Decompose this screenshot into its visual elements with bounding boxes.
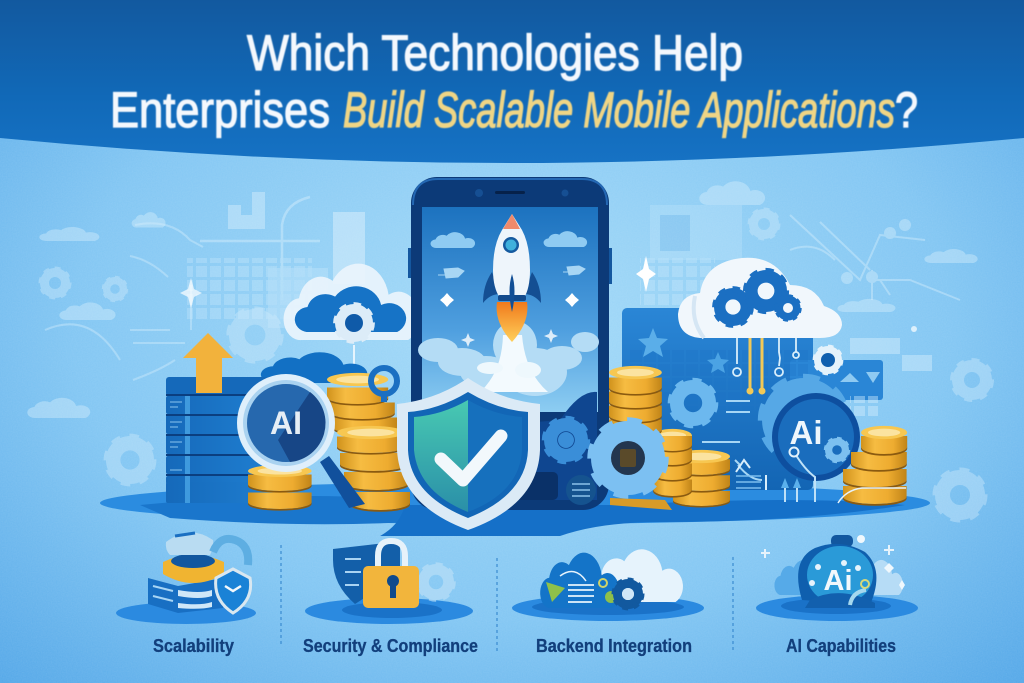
document lines [568, 585, 594, 602]
cloud wires [733, 338, 799, 376]
panel arrow lines [702, 401, 762, 480]
feature: Scalability [116, 532, 256, 656]
faint left clouds [27, 212, 166, 418]
faint right grid and panels [640, 205, 932, 371]
faint left gears [41, 269, 279, 482]
flame [497, 302, 527, 342]
ground shadow [100, 482, 930, 536]
faint left connection lines [45, 223, 203, 380]
feature: AI Capabilities [756, 535, 918, 656]
security shield with check [397, 378, 540, 530]
upward arrow [183, 333, 233, 393]
left cloud with gear [284, 264, 419, 380]
dividers [281, 545, 733, 652]
icon: shield and padlock [305, 541, 473, 624]
low coin stack [248, 465, 312, 511]
icon: server and shield [116, 532, 256, 624]
cloud gears [715, 271, 800, 325]
chip gear [594, 424, 662, 492]
server stack [166, 377, 296, 503]
far right coin stack [838, 426, 907, 506]
question mark: ? [895, 82, 918, 138]
icon: AI dial [756, 535, 918, 621]
small gear right [815, 347, 841, 373]
label: Scalability [153, 636, 234, 656]
dial dots [809, 560, 861, 586]
white sparkles [180, 256, 917, 332]
title line 2 white: Enterprises [110, 82, 330, 138]
label: AI Capabilities [786, 636, 896, 656]
AI letters: Ai [790, 414, 822, 451]
right coin stacks [609, 366, 730, 510]
panel gear [672, 382, 714, 424]
phone lower dark details [440, 392, 597, 505]
back blue cloud [261, 352, 367, 383]
small blue key ring [370, 368, 397, 402]
left tall coin stacks [327, 373, 410, 512]
sparkles [761, 535, 905, 590]
small arrows [438, 268, 464, 278]
panel mini icons [840, 372, 880, 383]
panel stars [638, 328, 668, 357]
right panel [622, 308, 883, 490]
label: Backend Integration [536, 636, 692, 656]
server layers [166, 395, 286, 503]
handle [320, 456, 365, 508]
rocket [483, 214, 541, 342]
lens text: AI [270, 405, 302, 441]
faint right network lines [790, 215, 960, 300]
smoke clouds [418, 321, 599, 396]
faint right clouds and gears [699, 181, 991, 518]
check mark [441, 436, 501, 480]
sparkles [440, 293, 579, 347]
label: Security & Compliance [303, 636, 478, 656]
feature: Backend Integration [512, 549, 704, 656]
screen clouds [431, 231, 587, 248]
magnifier with AI [237, 374, 365, 508]
feature: Security & Compliance [303, 541, 478, 656]
smartphone [408, 177, 612, 510]
title [110, 25, 918, 138]
faint background tech illustrations [27, 181, 991, 518]
gold wires [750, 338, 762, 390]
right cloud with gears [678, 258, 842, 394]
icon: clouds with gear and document [512, 549, 704, 621]
faint left city grid [187, 192, 365, 328]
AI circuit badge [736, 381, 860, 502]
phone screen [418, 207, 599, 412]
dial letters: Ai [824, 565, 852, 597]
top title band [0, 0, 1024, 163]
title line 1: Which Technologies Help [247, 25, 743, 81]
